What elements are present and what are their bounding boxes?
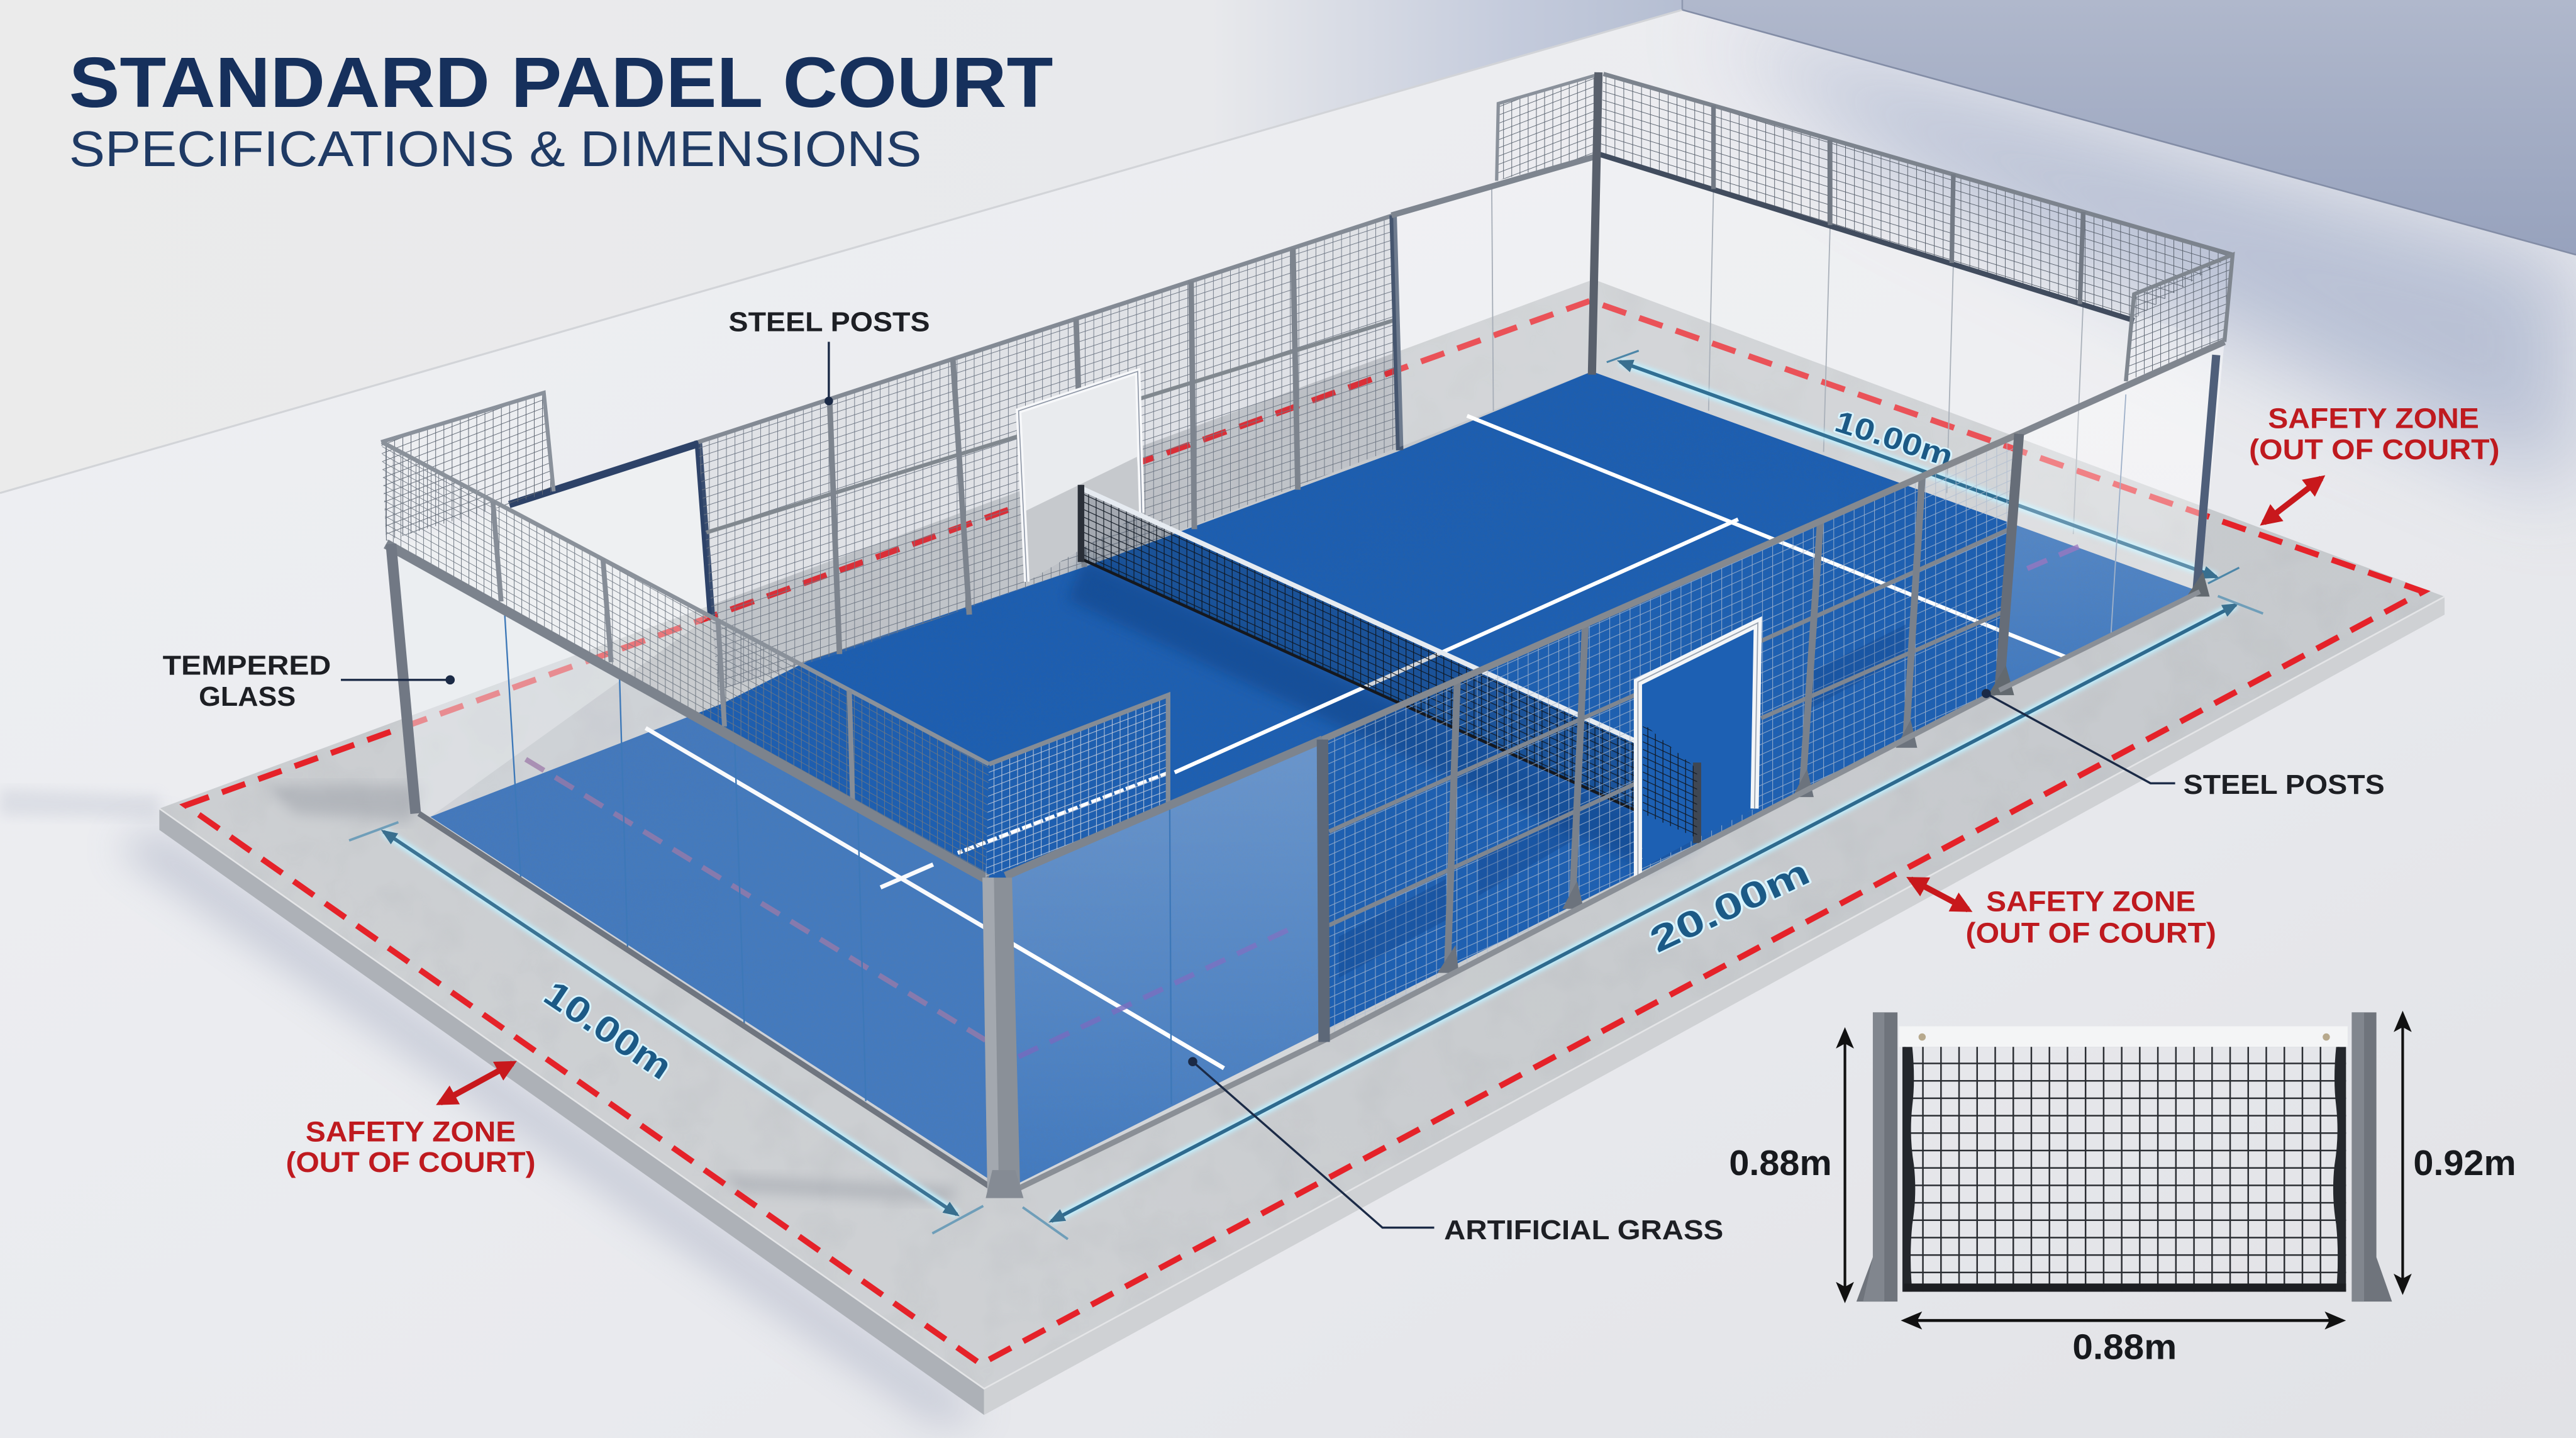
callout: safety zone top right bbox=[2249, 403, 2500, 523]
label: 20.00m: 20.00m bbox=[1644, 852, 1816, 961]
callout: safety zone bottom left bbox=[286, 1063, 536, 1178]
reflected dashed lines in glass bbox=[526, 544, 2085, 1057]
label: net width: 0.88m bbox=[2072, 1327, 2177, 1367]
door and near long mesh wall bbox=[1323, 434, 2019, 1039]
near right glass panel with mesh return bbox=[1988, 255, 2233, 695]
callout: tempered glass bbox=[163, 650, 455, 712]
callout: steel posts right: STEEL POSTS bbox=[2184, 770, 2385, 800]
inset net mesh bbox=[1899, 1027, 2348, 1291]
artificial grass court floor bbox=[430, 371, 2200, 1190]
callout: tempered glass: TEMPERED bbox=[163, 650, 331, 681]
door opening bbox=[1638, 623, 1758, 879]
label: net height right: 0.92m bbox=[2413, 1143, 2516, 1183]
inset net posts bbox=[1857, 1012, 2392, 1301]
callout: safety zone middle bbox=[1911, 879, 2216, 949]
label: 10.00m far end: 10.00m bbox=[1831, 404, 1957, 474]
back corner steel post bbox=[1592, 72, 1599, 375]
net detail inset bbox=[1729, 1012, 2516, 1367]
callout: artificial grass bbox=[1188, 1057, 1723, 1246]
tennis-style net bbox=[1081, 485, 1697, 843]
back door opening bbox=[1019, 371, 1142, 582]
safety zone dashed boundary bbox=[186, 301, 2423, 1364]
callout: safety zone middle: (OUT OF COURT) bbox=[1966, 917, 2216, 949]
callout: safety zone middle: SAFETY ZONE bbox=[1986, 886, 2196, 918]
dimension: 20.00m long side bbox=[1023, 596, 2263, 1239]
callout: safety zone bottom left: (OUT OF COURT) bbox=[286, 1146, 536, 1178]
label: 10.00m near end: 10.00m bbox=[537, 973, 679, 1088]
far end wall: glass and mesh bbox=[1592, 74, 2233, 592]
callout: steel posts top bbox=[729, 307, 930, 405]
dimension: 10.00m near end bbox=[349, 822, 983, 1234]
dimension: 10.00m far end bbox=[1607, 351, 2239, 583]
callout: steel posts right bbox=[1982, 689, 2385, 800]
back glass panel with mesh return bbox=[1392, 74, 1600, 447]
callout: artificial grass: ARTIFICIAL GRASS bbox=[1444, 1215, 1723, 1246]
court lines bbox=[646, 416, 2067, 1068]
callout: steel posts top: STEEL POSTS bbox=[729, 307, 930, 337]
label: net height left: 0.88m bbox=[1729, 1143, 1832, 1183]
inset left height arrow bbox=[1845, 1030, 1846, 1300]
inset width arrow bbox=[1904, 1320, 2343, 1321]
callout: safety zone bottom left: SAFETY ZONE bbox=[306, 1115, 516, 1147]
inset right height arrow bbox=[2402, 1014, 2403, 1291]
callout: safety zone top right: (OUT OF COURT) bbox=[2249, 433, 2500, 465]
callout: safety zone top right: SAFETY ZONE bbox=[2268, 403, 2479, 435]
title: STANDARD PADEL COURT bbox=[69, 43, 1053, 123]
near end wall: tempered glass and mesh bbox=[382, 442, 1006, 1195]
left corner mesh return bbox=[381, 393, 553, 541]
front corner steel post bbox=[982, 878, 1023, 1198]
near glass panel with front mesh return bbox=[985, 695, 1328, 1195]
back left wall: glass panel and navy frame bbox=[386, 440, 711, 817]
concrete slab bbox=[159, 279, 2445, 1415]
back left mesh wall with steel posts bbox=[698, 215, 1400, 690]
subtitle: SPECIFICATIONS & DIMENSIONS bbox=[69, 121, 921, 177]
callout: tempered glass: GLASS bbox=[199, 682, 296, 712]
